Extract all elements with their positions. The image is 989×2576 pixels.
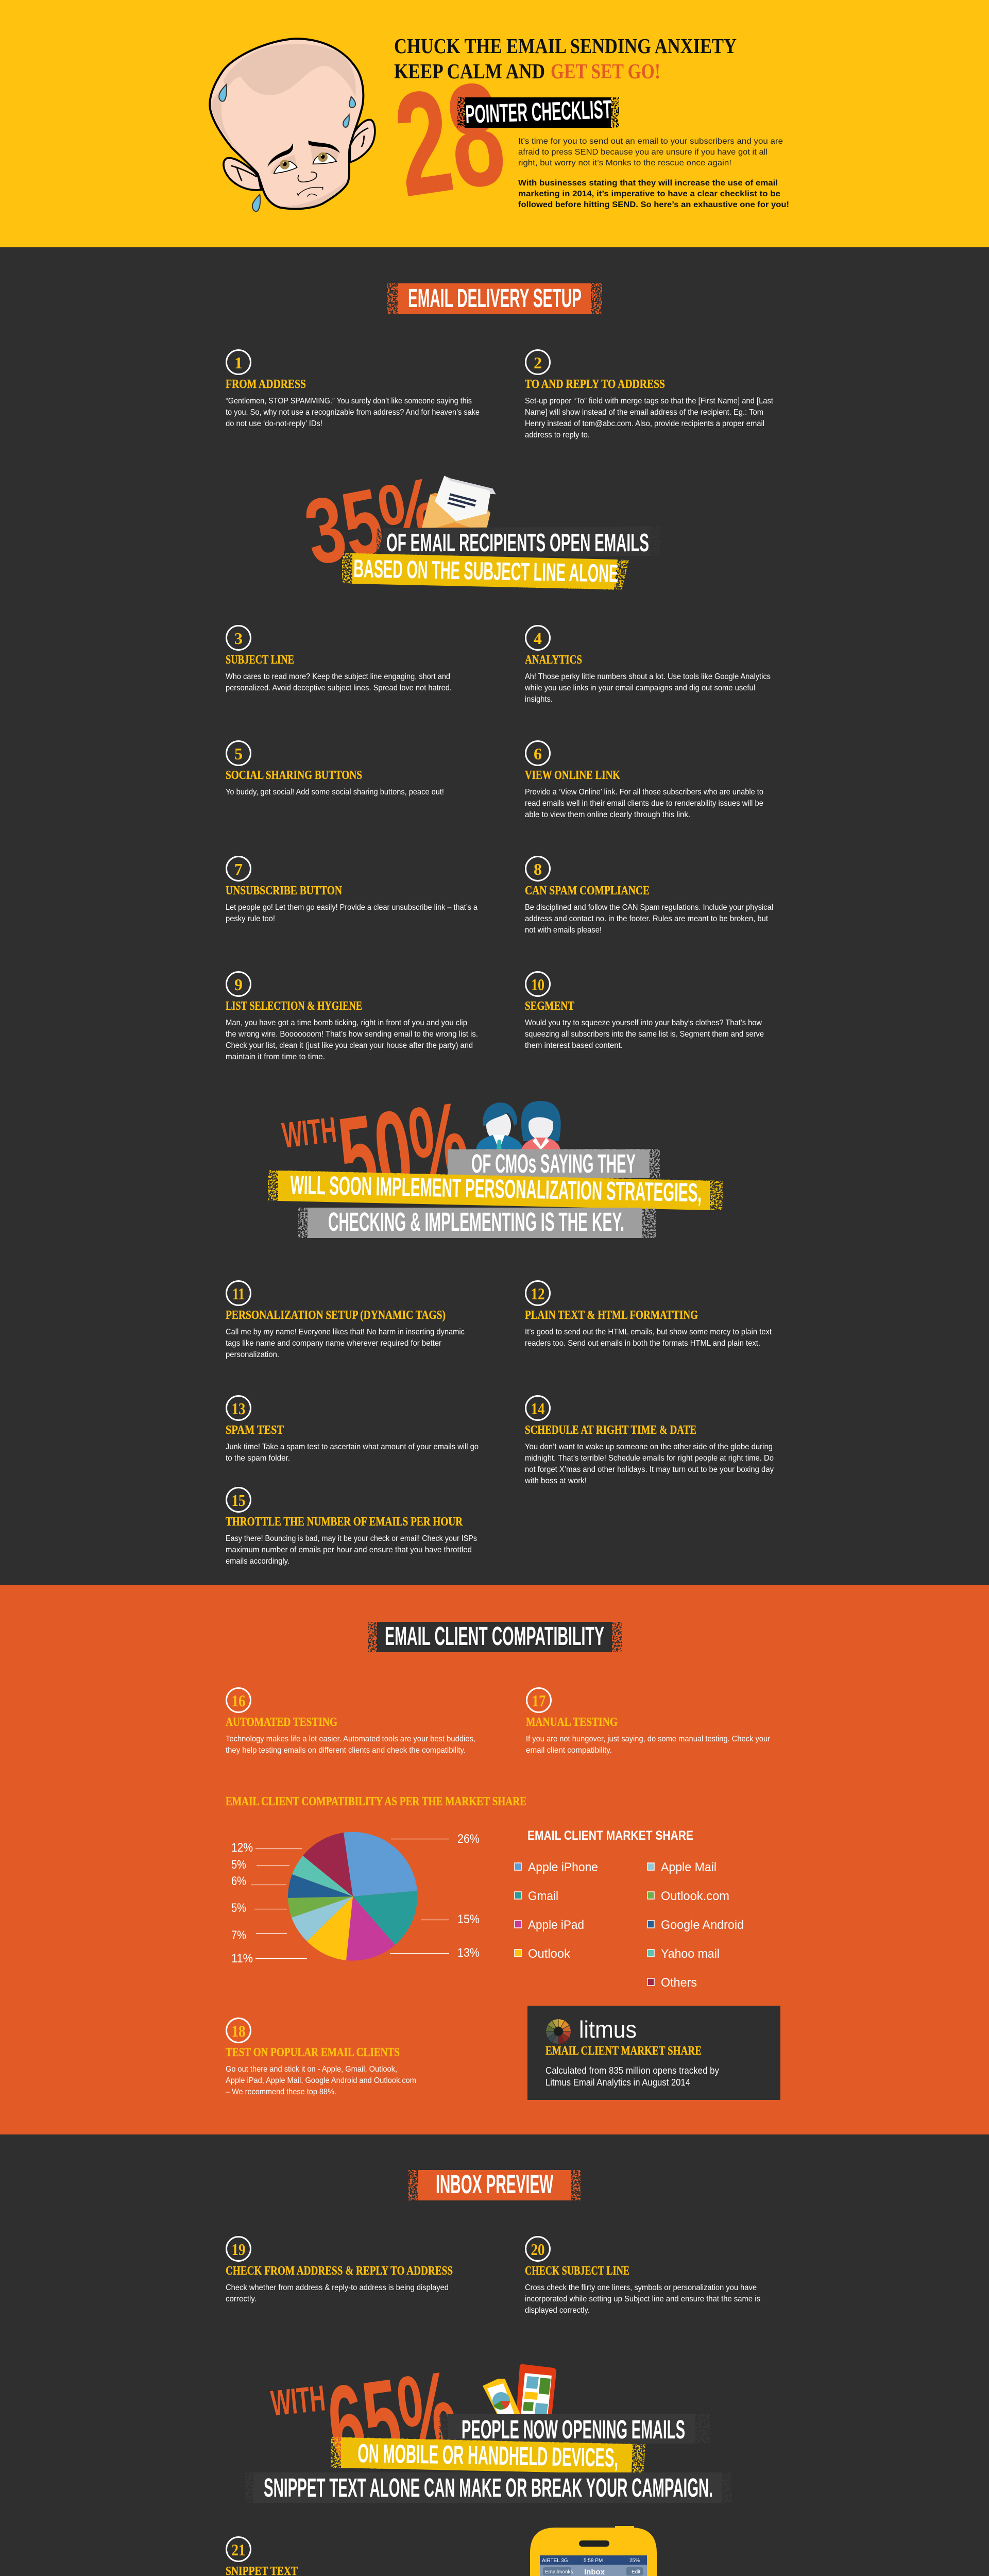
body: Ah! Those perky little numbers shout a lot. Use tools like Google Analytics <box>525 672 771 681</box>
number 11 <box>227 1281 250 1306</box>
icon: worried monk head <box>210 39 375 211</box>
body: personalized. Avoid deceptive subject lines. Spread love not hatred. <box>226 684 452 692</box>
body: Check whether from address & reply-to address is being displayed <box>226 2283 449 2292</box>
body <box>525 1328 772 1348</box>
big number 50 percent: 50% <box>332 1077 476 1224</box>
number 8 <box>525 856 550 881</box>
number 20: 20 <box>531 2240 545 2259</box>
pie chart: 5% <box>231 1858 246 1872</box>
title: KEEP CALM AND <box>394 59 545 83</box>
number 10 <box>525 972 550 996</box>
body: to you. So, why not use a recognizable from address? And for heaven’s sake <box>226 408 480 417</box>
item 21 <box>226 2537 453 2576</box>
number 13: 13 <box>232 1399 245 1418</box>
number 21 <box>227 2537 250 2562</box>
number 2: 2 <box>534 353 542 372</box>
band: on mobile or handheld: ON MOBILE OR HANDHELD DEVICES, <box>357 2438 619 2472</box>
legend title: EMAIL CLIENT MARKET SHARE <box>527 1828 693 1843</box>
body: pesky rule too! <box>226 914 275 923</box>
banner: email delivery setup <box>387 283 602 314</box>
body: Who cares to read more? Keep the subject line engaging, short and <box>226 672 450 681</box>
icon: phone with inbox screenshot: 5:58 PM <box>584 2558 603 2564</box>
number 14: 14 <box>531 1399 545 1418</box>
litmus note: Litmus Email Analytics in August 2014 <box>545 2077 690 2088</box>
body: to the spam folder. <box>226 1454 290 1463</box>
item 5 <box>226 741 444 796</box>
body <box>226 397 480 428</box>
number 9 <box>227 972 250 996</box>
body: them interest based content. <box>525 1041 623 1050</box>
number 3 <box>227 625 250 650</box>
heading: SUBJECT LINE <box>226 653 294 667</box>
banner: pointer checklist <box>457 95 619 129</box>
title: CHUCK THE EMAIL SENDING ANXIETY <box>394 34 737 58</box>
body: Let people go! Let them go easily! Provide a clear unsubscribe link – that’s a <box>226 903 478 912</box>
legend: Outlook <box>528 1947 571 1961</box>
number 9: 9 <box>234 975 243 994</box>
body <box>226 672 452 692</box>
intro text: With businesses stating that they will increase the use of email <box>518 179 778 188</box>
number 17 <box>526 1688 551 1713</box>
body <box>226 1735 475 1755</box>
panel: email delivery setup <box>0 247 989 1585</box>
pie chart: 11% <box>231 1952 253 1965</box>
big number 28: 28 <box>385 50 514 228</box>
banner: pointer checklist: POINTER CHECKLIST <box>465 95 612 129</box>
pie chart: 15% <box>457 1912 480 1926</box>
item 15 <box>226 1488 477 1566</box>
body: “Gentlemen, STOP SPAMMING.” You surely don’t like someone saying this <box>226 397 472 405</box>
text: with: WITH <box>269 2378 327 2424</box>
body <box>226 903 478 923</box>
heading: CHECK SUBJECT LINE <box>525 2264 629 2278</box>
big number 65 percent: 65% <box>320 2346 465 2493</box>
item 12 <box>525 1281 772 1348</box>
body: – We recommend these top 88%. <box>226 2088 336 2096</box>
body: Cross check the flirty one liners, symbols or personalization you have <box>525 2283 757 2292</box>
panel: email client compatibility <box>0 1585 989 2134</box>
band: based on subject line <box>342 553 629 590</box>
heading: SOCIAL SHARING BUTTONS <box>226 769 362 782</box>
band: of email recipients <box>377 526 660 557</box>
panel: header <box>0 0 989 247</box>
body: do not use ‘do-not-reply’ IDs! <box>226 419 322 428</box>
body: the wrong wire. Booooooom! That’s how sending email to the wrong list is. <box>226 1030 478 1039</box>
body: able to view them online clearly through this link. <box>525 810 690 819</box>
panel: inbox preview <box>0 2134 989 2576</box>
pie chart: 13% <box>457 1946 480 1960</box>
body: read emails well in their email clients due to renderability issues will be <box>525 799 763 808</box>
item 1 <box>226 350 480 428</box>
title <box>394 34 737 83</box>
body: readers too. Send out emails in both the formats HTML and plain text. <box>525 1339 760 1348</box>
body: Name] will show instead of the email address of the recipient. Eg.: Tom <box>525 408 763 417</box>
body: insights. <box>525 695 553 704</box>
pie chart: 26% <box>457 1832 480 1846</box>
number 13 <box>227 1396 250 1420</box>
body <box>226 1328 465 1359</box>
heading: PERSONALIZATION SETUP (DYNAMIC TAGS) <box>226 1309 446 1322</box>
heading: SCHEDULE AT RIGHT TIME & DATE <box>525 1423 696 1437</box>
panel: litmus source <box>527 2006 780 2100</box>
number 16: 16 <box>232 1691 245 1710</box>
icon: envelope <box>422 476 496 528</box>
number 4 <box>525 625 550 650</box>
callout: 65 percent <box>245 2346 731 2503</box>
banner: email delivery setup: EMAIL DELIVERY SETUP <box>408 283 582 313</box>
number 19 <box>227 2237 250 2261</box>
number 6 <box>525 741 550 766</box>
number 10: 10 <box>531 975 544 994</box>
body: Man, you have got a time bomb ticking, right in front of you and you clip <box>226 1019 467 1027</box>
number 15 <box>227 1488 250 1512</box>
heading: TEST ON POPULAR EMAIL CLIENTS <box>226 2046 400 2059</box>
icon: litmus wheel <box>545 2019 571 2044</box>
band: on mobile or handheld <box>331 2437 645 2474</box>
number 14 <box>525 1396 550 1420</box>
intro text: It’s time for you to send out an email to your subscribers and you are <box>518 137 783 146</box>
body <box>525 903 773 935</box>
body <box>525 788 763 819</box>
legend: Yahoo mail <box>661 1947 720 1961</box>
icon: phone with inbox screenshot: 25% <box>629 2558 640 2564</box>
chart heading: EMAIL CLIENT COMPATIBILITY AS PER THE MARKET SHARE <box>226 1795 526 1808</box>
intro text: followed before hitting SEND. So here’s an exhaustive one for you! <box>518 200 789 209</box>
litmus heading: EMAIL CLIENT MARKET SHARE <box>545 2044 702 2058</box>
litmus note <box>545 2065 719 2088</box>
body: Call me by my name! Everyone likes that! No harm in inserting dynamic <box>226 1328 465 1336</box>
body: address to reply to. <box>525 431 590 439</box>
heading: ANALYTICS <box>525 653 582 667</box>
number 20 <box>525 2237 550 2261</box>
body: It’s good to send out the HTML emails, but show some mercy to plain text <box>525 1328 772 1336</box>
body <box>525 397 774 439</box>
body <box>525 2283 760 2315</box>
body: Be disciplined and follow the CAN Spam regulations. Include your physical <box>525 903 773 912</box>
item 7 <box>226 856 478 923</box>
number 3: 3 <box>234 629 243 648</box>
heading: UNSUBSCRIBE BUTTON <box>226 884 343 897</box>
body: Go out there and stick it on - Apple, Gmail, Outlook, <box>226 2065 397 2074</box>
heading: CAN SPAM COMPLIANCE <box>525 884 650 897</box>
body: not forget X’mas and other holidays. It may turn out to be your boxing day <box>525 1465 774 1474</box>
body: midnight. That’s terrible! Schedule emails for right people at right time. Do <box>525 1454 774 1463</box>
heading: PLAIN TEXT & HTML FORMATTING <box>525 1309 698 1322</box>
body: Provide a ‘View Online’ link. For all those subscribers who are unable to <box>525 788 763 796</box>
band: will soon implement <box>268 1170 723 1210</box>
number 1: 1 <box>234 353 243 372</box>
heading: MANUAL TESTING <box>526 1716 618 1729</box>
number 7: 7 <box>234 860 243 878</box>
band: checking and implementing <box>298 1207 656 1238</box>
number 4: 4 <box>534 629 542 648</box>
number 12: 12 <box>531 1284 545 1303</box>
litmus wordmark: litmus <box>579 2016 637 2043</box>
number 5 <box>227 741 250 766</box>
body: If you are not hungover, just saying, do some manual testing. Check your <box>526 1735 771 1743</box>
pie chart: 6% <box>231 1874 246 1888</box>
number 2 <box>525 350 550 374</box>
body <box>526 1735 771 1755</box>
item 20 <box>525 2237 760 2315</box>
item 14 <box>524 1396 774 1485</box>
icon: phone with inbox screenshot: Edit <box>632 2569 640 2575</box>
body: Check your list, clean it (just like you clean your house after the party) and <box>226 1041 473 1050</box>
icon: phones <box>483 2364 556 2416</box>
item 16 <box>226 1688 475 1755</box>
legend entries <box>515 1863 654 1986</box>
body: Henry instead of tom@abc.com. Also, provide recipients a proper email <box>525 419 764 428</box>
body <box>226 2283 449 2303</box>
icon: man and woman <box>476 1101 561 1150</box>
body: with boss at work! <box>524 1477 587 1485</box>
big number 35 percent: 35% <box>297 457 450 585</box>
callout: 35 percent <box>297 457 660 590</box>
body <box>226 1443 479 1463</box>
body: Easy there! Bouncing is bad, may it be your check or email! Check your ISPs <box>226 1534 477 1543</box>
item 19 <box>226 2237 453 2303</box>
body: email client compatibility. <box>526 1746 612 1755</box>
body: incorporated while setting up Subject line and ensure that the same is <box>525 2295 760 2303</box>
item 3 <box>226 625 452 692</box>
item 6 <box>525 741 763 819</box>
band: of cmos: OF CMOs SAYING THEY <box>471 1149 636 1178</box>
band: of cmos <box>448 1149 660 1178</box>
legend: Outlook.com <box>661 1889 729 1903</box>
number 7 <box>227 856 250 881</box>
body <box>226 1534 477 1566</box>
number 5: 5 <box>234 744 243 763</box>
intro text <box>518 137 789 209</box>
litmus note: Calculated from 835 million opens tracked by <box>545 2065 719 2076</box>
body: they help testing emails on different clients and check the compatibility. <box>226 1746 466 1755</box>
body: You don’t want to wake up someone on the other side of the globe during <box>525 1443 773 1451</box>
body: maximum number of emails per hour and ensure that you have throttled <box>226 1546 472 1554</box>
number 21: 21 <box>232 2540 245 2559</box>
banner: email client compatibility: EMAIL CLIENT COMPATIBILITY <box>385 1621 604 1651</box>
banner: email client compatibility <box>368 1621 622 1652</box>
heading: CHECK FROM ADDRESS & REPLY TO ADDRESS <box>226 2264 453 2278</box>
number 12 <box>525 1281 550 1306</box>
heading: FROM ADDRESS <box>226 378 306 391</box>
number 1 <box>227 350 250 374</box>
body: squeezing all subscribers into the same list is. Segment them and serve <box>525 1030 764 1039</box>
number 19: 19 <box>232 2240 245 2259</box>
number 11: 11 <box>232 1284 245 1303</box>
body: while you use links in your email campaigns and dig out some useful <box>524 684 755 692</box>
item 2 <box>525 350 774 439</box>
icon: phone with inbox screenshot: AIRTEL 3G <box>542 2558 568 2564</box>
body: Set-up proper “To” field with merge tags so that the [First Name] and [Last <box>525 397 774 405</box>
heading: VIEW ONLINE LINK <box>525 769 620 782</box>
legend: Apple iPhone <box>528 1860 598 1874</box>
intro text: marketing in 2014, it’s imperative to have a clear checklist to be <box>518 190 780 198</box>
text: with: WITH <box>280 1110 338 1156</box>
body: Yo buddy, get social! Add some social sharing buttons, peace out! <box>226 788 444 796</box>
body: maintain it from time to time. <box>226 1053 325 1061</box>
legend <box>515 1828 744 1990</box>
item 4 <box>524 625 771 704</box>
legend: Gmail <box>528 1889 558 1903</box>
band: people now opening: PEOPLE NOW OPENING EMAILS <box>462 2415 685 2444</box>
body: emails accordingly. <box>226 1557 289 1566</box>
heading: SEGMENT <box>525 999 574 1013</box>
band: people now opening <box>439 2414 710 2444</box>
body <box>524 672 771 704</box>
callout: 50 percent <box>268 1077 723 1238</box>
banner: inbox preview <box>408 2170 581 2200</box>
body: not with emails please! <box>525 926 602 935</box>
item 9 <box>226 972 478 1061</box>
item 18 <box>226 2019 416 2096</box>
heading: LIST SELECTION & HYGIENE <box>226 999 362 1013</box>
body: correctly. <box>226 2295 257 2303</box>
number 17: 17 <box>532 1691 546 1710</box>
legend: Apple Mail <box>661 1860 717 1874</box>
item 8 <box>525 856 773 935</box>
band: checking and implementing: CHECKING & IMPLEMENTING IS THE KEY. <box>328 1207 624 1236</box>
body <box>525 1019 764 1050</box>
heading: TO AND REPLY TO ADDRESS <box>525 378 665 391</box>
body: Technology makes life a lot easier. Automated tools are your best buddies, <box>226 1735 475 1743</box>
legend: Apple iPad <box>528 1918 584 1932</box>
heading: THROTTLE THE NUMBER OF EMAILS PER HOUR <box>226 1515 463 1529</box>
title: GET SET GO! <box>551 59 660 83</box>
number 18: 18 <box>232 2022 245 2040</box>
band: based on subject line: BASED ON THE SUBJECT LINE ALONE <box>353 555 619 588</box>
body: Junk time! Take a spam test to ascertain what amount of your emails will go <box>226 1443 479 1451</box>
item 10 <box>525 972 764 1050</box>
number 16 <box>227 1688 250 1713</box>
body <box>524 1443 774 1485</box>
body <box>226 2065 416 2096</box>
body: Apple iPad, Apple Mail, Google Android and Outlook.com <box>226 2076 416 2085</box>
pie chart: 5% <box>231 1901 246 1915</box>
pie chart <box>231 1832 480 1965</box>
heading: SPAM TEST <box>226 1423 284 1437</box>
pie chart: 12% <box>231 1841 253 1855</box>
number 6: 6 <box>534 744 542 763</box>
legend: Google Android <box>661 1918 744 1932</box>
intro text: right, but worry not it’s Monks to the rescue once again! <box>518 159 731 167</box>
band: snippet text <box>245 2472 731 2503</box>
item 13 <box>226 1396 479 1463</box>
number 8: 8 <box>534 860 542 878</box>
pie chart: 7% <box>231 1928 246 1942</box>
number 18 <box>227 2019 250 2042</box>
item 17 <box>526 1688 771 1755</box>
body: personalization. <box>226 1350 279 1359</box>
band: of email recipients: OF EMAIL RECIPIENTS OPEN EMAILS <box>386 529 649 557</box>
banner: inbox preview: INBOX PREVIEW <box>436 2170 553 2199</box>
heading: AUTOMATED TESTING <box>226 1716 337 1729</box>
legend: Others <box>661 1976 697 1990</box>
body: address and contact no. in the footer. Rules are meant to be broken, but <box>525 914 769 923</box>
body: Would you try to squeeze yourself into your baby’s clothes? That’s how <box>525 1019 762 1027</box>
body: tags like name and company name wherever required for better <box>226 1339 442 1348</box>
item 11 <box>226 1281 465 1359</box>
body <box>226 1019 478 1061</box>
number 15: 15 <box>232 1491 245 1510</box>
intro text: afraid to press SEND because you are unsure if you have got it all <box>518 148 768 157</box>
icon: phone with inbox screenshot: Emailmonks <box>545 2569 573 2575</box>
icon: phone with inbox screenshot <box>530 2526 657 2576</box>
body: displayed correctly. <box>525 2306 590 2315</box>
